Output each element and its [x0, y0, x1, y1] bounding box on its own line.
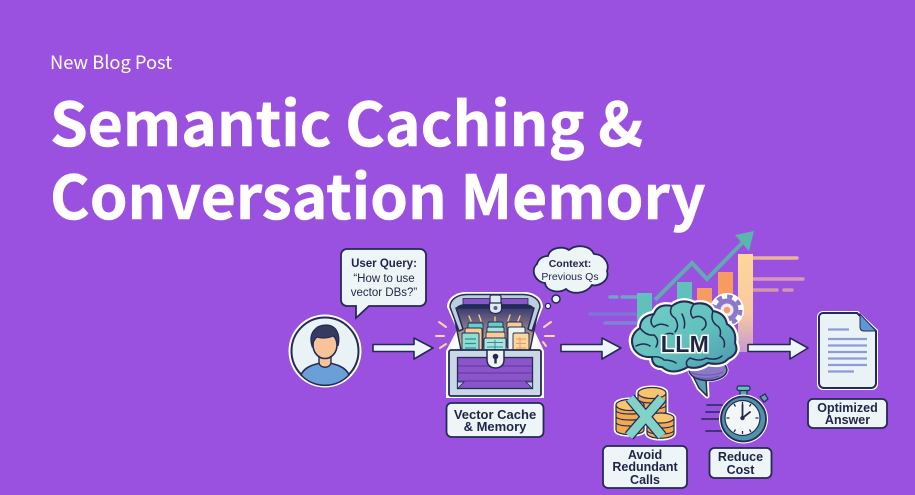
icon: LLM brain: LLM — [661, 331, 709, 357]
label: Reduce Cost — [710, 448, 772, 478]
context thought cloud: Previous Qs — [541, 271, 599, 283]
icon: LLM brain — [632, 301, 736, 396]
label: Reduce Cost: Reduce — [718, 450, 763, 464]
user speech bubble: vector DBs?” — [351, 287, 417, 299]
arrow: user to cache — [373, 338, 433, 359]
glow rays around chest — [436, 322, 554, 348]
label: Vector Cache & Memory: & Memory — [464, 419, 527, 434]
label: Vector Cache & Memory — [446, 403, 544, 437]
icon: document — [817, 311, 878, 390]
user speech bubble: “How to use — [353, 273, 415, 285]
label: Avoid Redundant Calls — [603, 446, 687, 488]
icon: user avatar — [288, 314, 362, 388]
icon: stopwatch — [702, 386, 768, 444]
title: Conversation Memory — [50, 150, 705, 237]
arrow: LLM to answer — [748, 338, 808, 359]
context thought cloud — [534, 246, 608, 309]
icon: gear — [713, 296, 741, 324]
user speech bubble: User Query: — [351, 258, 417, 270]
label: Avoid Redundant Calls: Avoid — [628, 448, 662, 462]
label: Optimized Answer: Optimized — [817, 401, 878, 415]
icon: treasure chest vector cache — [446, 292, 544, 398]
title — [50, 77, 706, 237]
arrow: cache to LLM — [561, 338, 621, 359]
label: Optimized Answer: Answer — [825, 413, 870, 427]
icon: coins crossed out — [616, 388, 674, 438]
title: Semantic Caching & — [50, 77, 643, 164]
label: Avoid Redundant Calls: Redundant — [612, 460, 678, 474]
eyebrow: New Blog Post: New Blog Post — [50, 49, 172, 75]
label: Vector Cache & Memory: Vector Cache — [454, 407, 536, 422]
context thought cloud: Context: — [549, 258, 591, 270]
label: Optimized Answer — [808, 399, 887, 428]
icon: growth chart with speed lines — [590, 231, 817, 352]
label: Avoid Redundant Calls: Calls — [630, 473, 660, 487]
user speech bubble — [341, 249, 426, 318]
label: Reduce Cost: Cost — [727, 463, 755, 477]
